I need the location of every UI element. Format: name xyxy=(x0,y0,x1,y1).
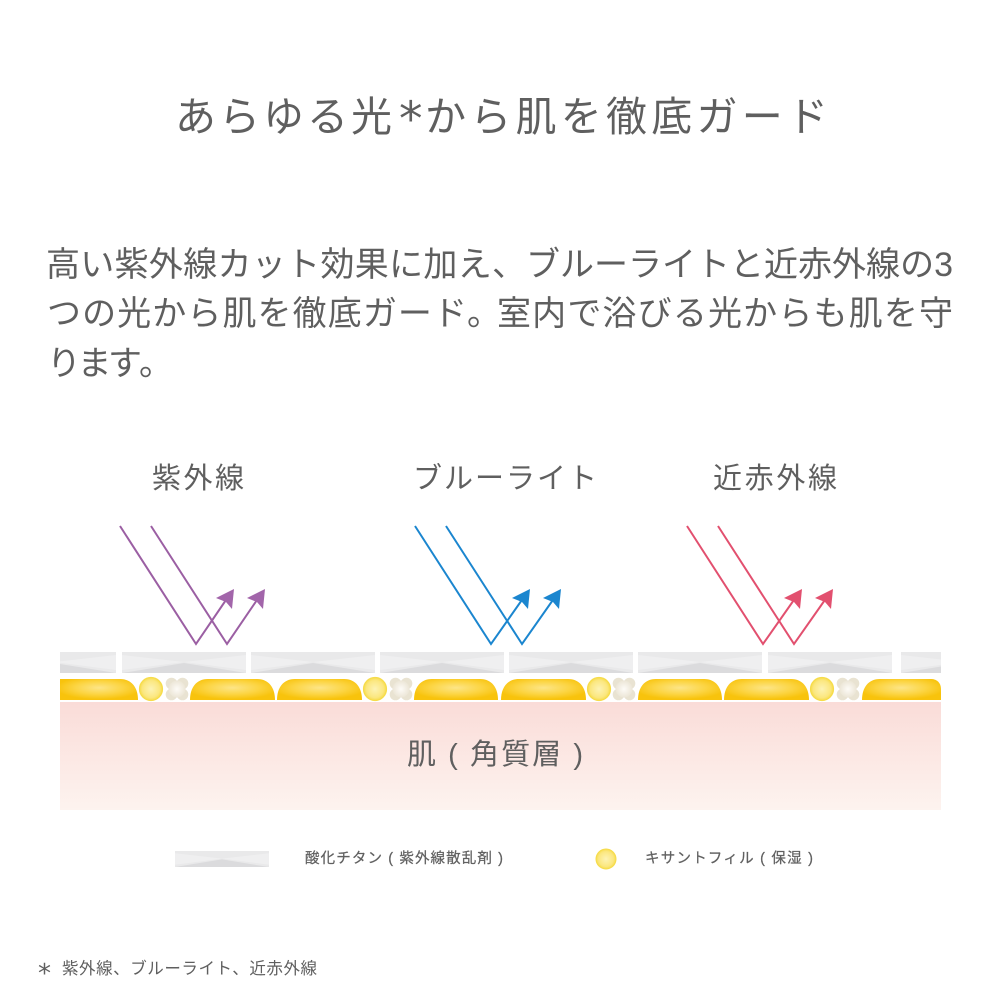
body text xyxy=(46,246,953,383)
legend: titanium oxide xyxy=(175,850,503,867)
footnote: 紫外線、ブルーライト、近赤外線 xyxy=(62,958,318,978)
legend: xanthophyll: キサントフィル ( 保湿 ) xyxy=(645,850,813,867)
legend: titanium oxide: 酸化チタン ( 紫外線散乱剤 ) xyxy=(305,850,503,867)
arrows: ultraviolet xyxy=(120,526,265,644)
body text: 。 xyxy=(139,345,173,383)
skin label: 肌 ( 角質層 ) xyxy=(407,738,583,771)
title xyxy=(175,92,828,147)
body text: 。 xyxy=(467,295,501,333)
label: near infrared: 近赤外線 xyxy=(713,462,837,495)
titanium oxide layer xyxy=(0,652,1000,673)
footnote: * xyxy=(38,959,51,989)
yellow moisture layer xyxy=(60,678,941,700)
legend: xanthophyll xyxy=(596,849,813,869)
footnote xyxy=(38,958,318,989)
label: blue light: ブルーライト xyxy=(413,462,597,495)
title: から肌を徹底ガード xyxy=(425,94,828,140)
title: あらゆる光 xyxy=(175,94,392,140)
arrows: near infrared xyxy=(687,526,833,644)
body text: つの光から肌を徹底ガード xyxy=(47,295,467,333)
body text: ります xyxy=(47,345,142,383)
title: * xyxy=(399,92,422,147)
arrows: blue light xyxy=(415,526,561,644)
skin layer xyxy=(60,702,941,810)
label: ultraviolet: 紫外線 xyxy=(152,462,244,495)
body text: 室内で浴びる光からも肌を守 xyxy=(497,295,953,333)
body text: 高い紫外線カット効果に加え、 xyxy=(46,246,526,284)
body text: ブルーライトと近赤外線の3 xyxy=(526,246,953,284)
